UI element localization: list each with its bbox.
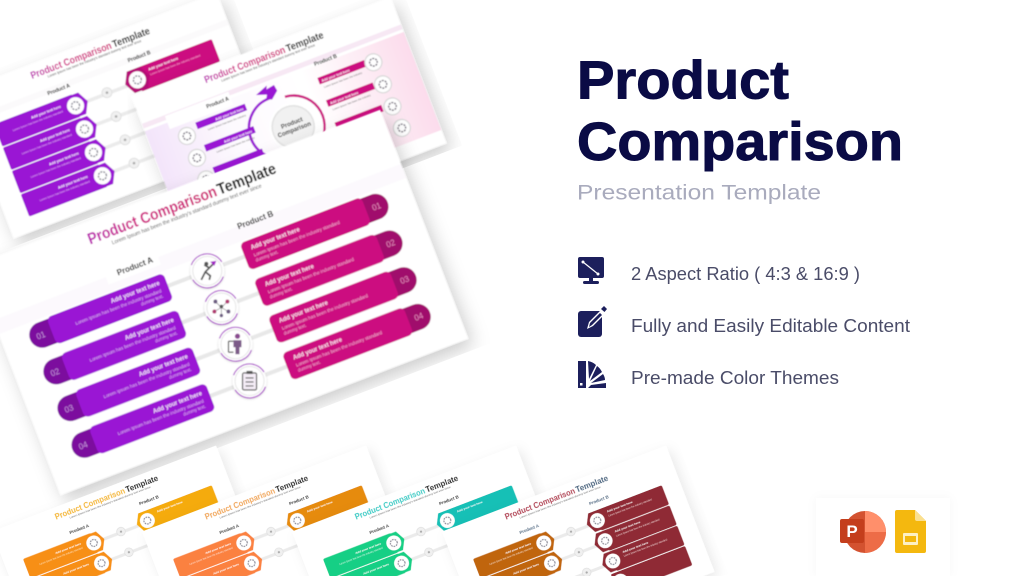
- slide: top-right circular comparison: [132, 0, 446, 242]
- slide: bottom yellow-orange variant: Template: [124, 473, 160, 495]
- pill A 01: [25, 273, 173, 353]
- slide: bottom yellow-orange variant: Product Comparison: [53, 486, 126, 522]
- slide: bottom brown-maroon variant: Add your text here: [512, 562, 540, 575]
- feature: editable content: [578, 306, 910, 337]
- slide: bottom brown-maroon variant: Lorem Ipsum has been the industry standard: [608, 498, 653, 518]
- slide: bottom brown-maroon variant: Add your text here: [505, 542, 532, 555]
- pill B 03: Add your text here: [278, 300, 329, 325]
- slide: bottom green-teal variant: Product B: [438, 494, 459, 506]
- slide: bottom brown-maroon variant: Lorem Ipsum has been the industry standard: [489, 546, 534, 566]
- slide: bottom green-teal variant: Lorem Ipsum has been the industry's standard dummy text ever since: [369, 485, 452, 520]
- slide: top-left purple and pink comparison: Lorem Ipsum has been the industry standard: [21, 133, 73, 156]
- pill A 03: Lorem Ipsum has been the industry standard: [103, 361, 191, 399]
- pill B 02: Add your text here: [264, 263, 315, 288]
- pill A 03: Add your text here: [138, 353, 189, 379]
- heading: Product A: Product A: [116, 255, 154, 278]
- pill B 04: dummy text.: [297, 359, 321, 373]
- slide: bottom coral-amber variant: Add your text here: [306, 500, 334, 514]
- slide: bottom yellow-orange variant: Add your text here: [62, 562, 90, 575]
- pill A 01: 01: [35, 330, 47, 342]
- slide: bottom green-teal variant: Add your text here: [456, 500, 484, 514]
- slide: bottom brown-maroon variant: Add your text here: [622, 540, 649, 554]
- slide: top-right circular comparison: Template: [285, 30, 326, 55]
- slide: top-left purple and pink comparison: Product A: [47, 83, 71, 97]
- slide: bottom brown-maroon variant: Lorem Ipsum has been the industry standard: [616, 518, 661, 538]
- slide: bottom brown-maroon variant: Add your text here: [614, 520, 641, 534]
- app icons card: [816, 498, 950, 576]
- pill A 02: [39, 310, 188, 390]
- slide: top-left purple and pink comparison: Lorem Ipsum has been the industry standard: [12, 109, 64, 132]
- slide: top-left purple and pink comparison: Add your text here: [148, 56, 179, 72]
- pill A 03: [53, 346, 202, 426]
- slide: bottom yellow-orange variant: Product A: [69, 523, 90, 535]
- pill A 02: 02: [49, 366, 61, 378]
- slide: bottom coral-amber variant: Product A: [219, 523, 240, 535]
- heading: Product Comparison: [577, 50, 903, 172]
- slide: top-left purple and pink comparison: Add your text here: [39, 128, 71, 143]
- slide: bottom brown-maroon variant: [442, 446, 714, 576]
- slide: bottom brown-maroon variant: Add your text here: [606, 500, 634, 514]
- pill B 01: Add your text here: [250, 226, 301, 251]
- pill B 03: [268, 262, 421, 344]
- slide: top-right circular comparison: Lorem Ipsum has been the industry: [216, 135, 256, 154]
- feature: color themes: [578, 361, 839, 388]
- pill B 01: Lorem Ipsum has been the industry standard: [253, 220, 341, 257]
- pill B 02: [254, 225, 407, 307]
- icon: PowerPoint: P: [846, 522, 858, 541]
- slide: top-right circular comparison: Lorem Ipsum has been the industry: [207, 113, 247, 131]
- pill B 02: dummy text.: [269, 286, 293, 299]
- heading: Product Comparison: Product: [577, 50, 789, 110]
- slide: bottom yellow-orange variant: Lorem Ipsum has been the industry standard: [39, 546, 84, 566]
- slide: top-right circular comparison: Product: [280, 117, 304, 131]
- icon: Google Slides: [895, 510, 926, 553]
- pill A 04: 04: [77, 440, 90, 452]
- text: editable content: Fully and Easily Editable Content: [631, 316, 910, 336]
- pill B 03: 03: [399, 274, 411, 286]
- icon: color swatch fan: [578, 361, 606, 388]
- product A pills: [25, 273, 216, 463]
- slide: main purple and pink comparison: [0, 110, 468, 495]
- main title: Template: [215, 161, 279, 199]
- pill B 02: 02: [385, 238, 397, 249]
- icon: edit pencil: [578, 306, 607, 337]
- slide: top-right circular comparison: Comparison: [277, 121, 312, 140]
- slide: top-right circular comparison: Lorem Ipsum has been the industry: [323, 70, 363, 89]
- pill A 04: Add your text here: [152, 390, 203, 415]
- pill B 04: [282, 299, 435, 381]
- heading: Product B: Product B: [236, 209, 275, 231]
- pill A 03: dummy text.: [168, 367, 192, 380]
- slide: bottom green-teal variant: Product Comparison: [353, 486, 426, 522]
- pill B 04: Add your text here: [292, 336, 343, 361]
- slide: bottom coral-amber variant: Product B: [288, 494, 309, 506]
- slide: top-left purple and pink comparison: Lorem Ipsum has been the industry standard: [39, 179, 91, 202]
- slide: bottom brown-maroon variant: Product Comparison: [503, 486, 576, 522]
- slide: top-left purple and pink comparison: [0, 0, 273, 238]
- pill B 03: dummy text.: [283, 323, 307, 336]
- slide: bottom green-teal variant: Lorem Ipsum has been the industry standard: [339, 546, 384, 566]
- slide: top-right circular comparison: Add your text here: [223, 129, 253, 144]
- heading: Product Comparison: Comparison: [577, 112, 903, 172]
- slide: bottom yellow-orange variant: Product B: [138, 494, 159, 506]
- pill A 02: dummy text.: [154, 330, 178, 343]
- slide: bottom coral-amber variant: Lorem Ipsum has been the industry's standard dummy text ever since: [219, 485, 302, 520]
- slide: bottom brown-maroon variant: Template: [574, 473, 610, 495]
- pill B 04: Lorem Ipsum has been the industry standard: [295, 330, 383, 368]
- main subtitle: Lorem Ipsum has been the industry's standard dummy text ever since: [111, 183, 263, 246]
- slide: top-left purple and pink comparison: Add your text here: [57, 175, 88, 190]
- slide: bottom green-teal variant: Template: [424, 473, 460, 495]
- slide: top-right circular comparison: Add your text here: [215, 107, 244, 122]
- pill A 01: Lorem Ipsum has been the industry standard: [75, 288, 163, 326]
- pill B 02: Lorem Ipsum has been the industry standard: [267, 256, 355, 294]
- slide: bottom brown-maroon variant: Lorem Ipsum has been the industry's standard dummy text ever since: [519, 485, 602, 520]
- slide: top-left purple and pink comparison: Lorem Ipsum has been the industry standard: [30, 156, 82, 179]
- slide: bottom coral-amber variant: Template: [274, 473, 310, 495]
- pill A 03: 03: [63, 403, 75, 415]
- pill A 04: dummy text.: [182, 404, 206, 417]
- slide: top-left purple and pink comparison: Template: [111, 26, 152, 50]
- pill A 04: Lorem Ipsum has been the industry standard: [117, 398, 205, 436]
- pill A 04: [67, 383, 216, 463]
- slide: top-right circular comparison: Add your text here: [321, 68, 351, 83]
- slide: bottom green-teal variant: [292, 446, 564, 576]
- slide: bottom yellow-orange variant: Add your text here: [156, 500, 184, 514]
- pill A 01: dummy text.: [140, 293, 164, 307]
- slide: top-left purple and pink comparison: Lorem Ipsum has been the industry's standard dummy text ever since: [47, 39, 142, 79]
- slide: bottom coral-amber variant: Product Comparison: [203, 486, 276, 522]
- pill A 02: Lorem Ipsum has been the industry standard: [89, 325, 177, 363]
- slide: bottom coral-amber variant: Add your text here: [212, 562, 240, 575]
- icon: monitor: [578, 257, 604, 284]
- text: color themes: Pre-made Color Themes: [631, 368, 839, 388]
- pill B 01: dummy text.: [255, 249, 279, 263]
- slide: bottom green-teal variant: Add your text here: [362, 562, 390, 575]
- slide: bottom brown-maroon variant: Product B: [588, 494, 609, 506]
- product B pills: [240, 189, 435, 381]
- feature: aspect ratio: [578, 257, 860, 284]
- slide: top-left purple and pink comparison: Add your text here: [31, 105, 62, 120]
- text: aspect ratio: 2 Aspect Ratio ( 4:3 & 16:9 ): [631, 264, 860, 284]
- pill B 04: 04: [413, 311, 425, 323]
- slide: top-left purple and pink comparison: Lorem Ipsum has been the industry standard: [150, 53, 201, 76]
- slide: top-right circular comparison: Lorem Ipsum has been the industry: [332, 93, 372, 111]
- slide: bottom coral-amber variant: [142, 446, 414, 576]
- slide: bottom yellow-orange variant: Lorem Ipsum has been the industry's standard dummy text ever since: [69, 485, 152, 520]
- slide: bottom brown-maroon variant: Lorem Ipsum has been the industry standard: [624, 538, 668, 558]
- slide: bottom coral-amber variant: Lorem Ipsum has been the industry standard: [189, 546, 234, 566]
- slide: bottom coral-amber variant: Add your text here: [205, 542, 232, 555]
- pill A 02: Add your text here: [124, 317, 175, 342]
- slide: bottom yellow-orange variant: [0, 446, 264, 576]
- pill B 03: Lorem Ipsum has been the industry standard: [281, 293, 369, 331]
- slide: bottom green-teal variant: Add your text here: [355, 542, 382, 555]
- slide: top-left purple and pink comparison: Add your text here: [48, 151, 80, 166]
- icon: clipboard: [228, 359, 271, 403]
- slide: top-right circular comparison: Product A: [206, 96, 230, 110]
- icon: flag climber: [186, 249, 229, 293]
- slide: top-left purple and pink comparison: Product Comparison: [29, 41, 113, 82]
- slide: top-right circular comparison: Product Comparison: [203, 45, 287, 86]
- slide: top-right circular comparison: Lorem Ipsum has been the industry's standard dummy text ever since: [221, 43, 316, 83]
- subheading: Presentation Template: [577, 180, 821, 204]
- slide: top-right circular comparison: Product B: [313, 54, 338, 68]
- pill B 01: 01: [371, 201, 383, 213]
- slide: bottom brown-maroon variant: Product A: [519, 523, 540, 535]
- slide: bottom yellow-orange variant: Add your text here: [55, 542, 82, 555]
- main title: [85, 161, 279, 248]
- slide: top-left purple and pink comparison: Product B: [127, 50, 152, 64]
- pill A 01: Add your text here: [110, 280, 161, 305]
- icon: person with board: [214, 322, 257, 366]
- main title: Product Comparison: [85, 183, 219, 248]
- slide: bottom green-teal variant: Product A: [369, 523, 390, 535]
- icon: network dots: [200, 286, 243, 329]
- pill B 01: [240, 189, 393, 271]
- slide: top-right circular comparison: Add your text here: [330, 91, 359, 105]
